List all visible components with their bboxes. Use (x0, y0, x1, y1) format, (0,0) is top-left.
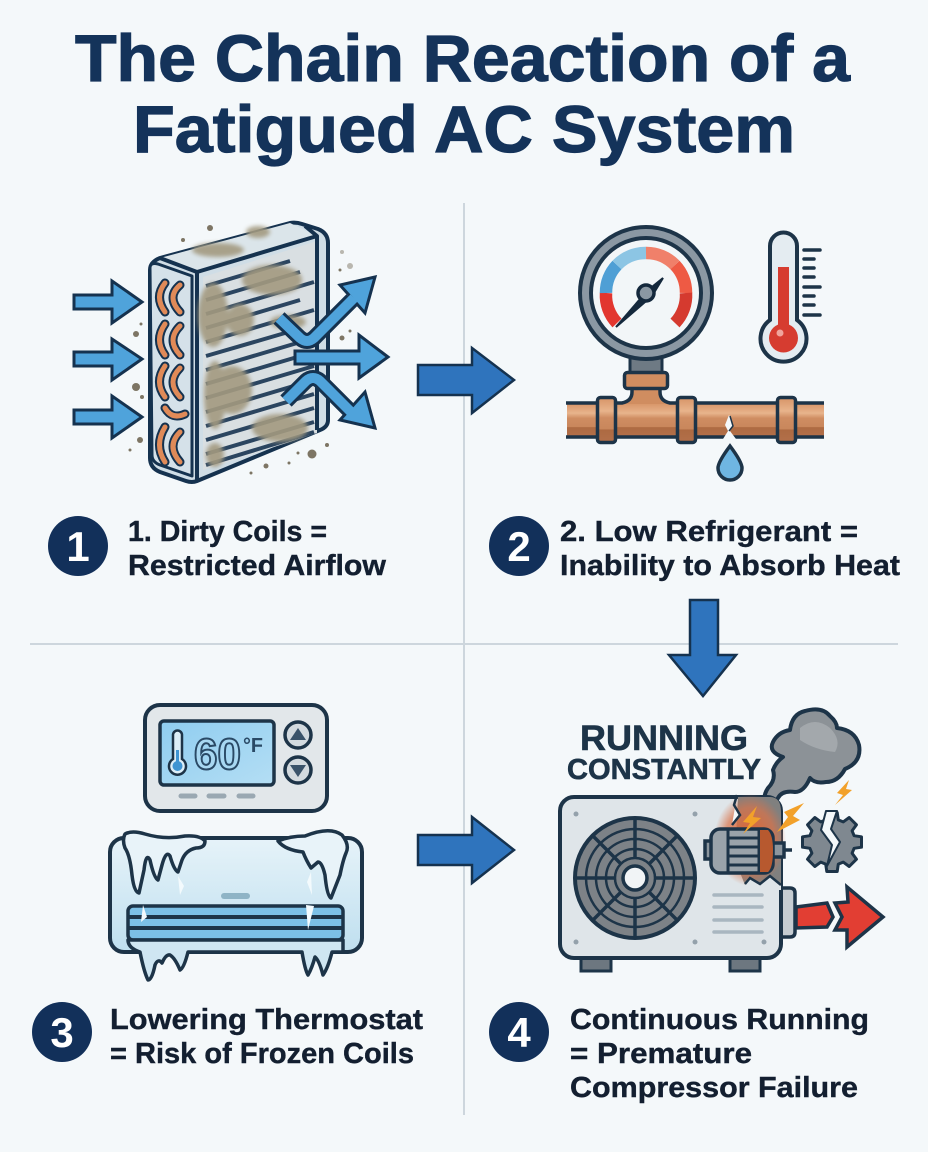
icon: airflow arrows in (74, 281, 142, 438)
icon: dirty coil (150, 223, 328, 482)
title (75, 21, 851, 166)
label: running constantly: RUNNING (580, 719, 748, 758)
copper coil ends (160, 283, 185, 462)
badge: 2 (489, 516, 549, 576)
icon: thermostat (145, 705, 327, 811)
step 3 text: Lowering Thermostat (110, 1004, 423, 1036)
icon: thermostat: °F (243, 735, 263, 757)
step 4 text: Compressor Failure (570, 1072, 858, 1104)
icon: burnt motor (705, 829, 792, 873)
panel: step 3 lowering thermostat (110, 705, 362, 980)
arrow: step 2 to 4 (669, 600, 736, 696)
step 3 text (110, 1004, 423, 1070)
step 2 text: 2. Low Refrigerant = (560, 516, 858, 548)
title: The Chain Reaction of a (75, 21, 851, 95)
icon: compressor unit (560, 794, 795, 971)
step 1 text: Restricted Airflow (128, 550, 386, 582)
gear crack (821, 811, 840, 866)
icon: pressure gauge (580, 227, 712, 374)
badge: 1 (48, 516, 108, 576)
step 1 text (128, 516, 386, 582)
icon: thermostat: 60 (194, 730, 241, 779)
icon: broken red arrow (796, 887, 883, 947)
icon: broken gear (802, 812, 862, 872)
icon: copper pipe (566, 372, 824, 442)
badge: 3: 3 (50, 1009, 74, 1056)
step 4 text: Continuous Running (570, 1004, 869, 1036)
icon: sparks (743, 780, 852, 834)
step 4 text: = Premature (570, 1038, 752, 1070)
dust blotches (192, 226, 308, 467)
badge: 3 (32, 1002, 92, 1062)
label: running constantly (567, 719, 761, 786)
arrow: step 3 to 4 (418, 817, 514, 883)
icon: leak drop (718, 446, 742, 480)
badge: 4 (489, 1002, 549, 1062)
badge: 4: 4 (507, 1009, 531, 1056)
icon: frozen AC unit (110, 831, 362, 980)
step 4 text (570, 1004, 869, 1104)
icon: fan grille (575, 818, 695, 938)
panel: step 2 low refrigerant (566, 227, 824, 480)
step 3 text: = Risk of Frozen Coils (110, 1038, 414, 1070)
badge: 1: 1 (66, 523, 90, 570)
step 1 text: 1. Dirty Coils = (128, 516, 327, 548)
label: running constantly: CONSTANTLY (567, 754, 761, 786)
icon: thermometer (760, 233, 820, 362)
step 2 text: Inability to Absorb Heat (560, 550, 900, 582)
panel: step 1 dirty coils (74, 223, 388, 482)
icon: smoke cloud (764, 709, 859, 810)
dust particles (128, 225, 353, 474)
panel: step 4 running constantly (560, 709, 883, 971)
arrow: step 1 to 2 (418, 348, 514, 413)
icon: airflow arrows out (279, 277, 388, 428)
step 2 text (560, 516, 900, 582)
badge: 2: 2 (507, 523, 531, 570)
title: Fatigued AC System (133, 92, 795, 166)
